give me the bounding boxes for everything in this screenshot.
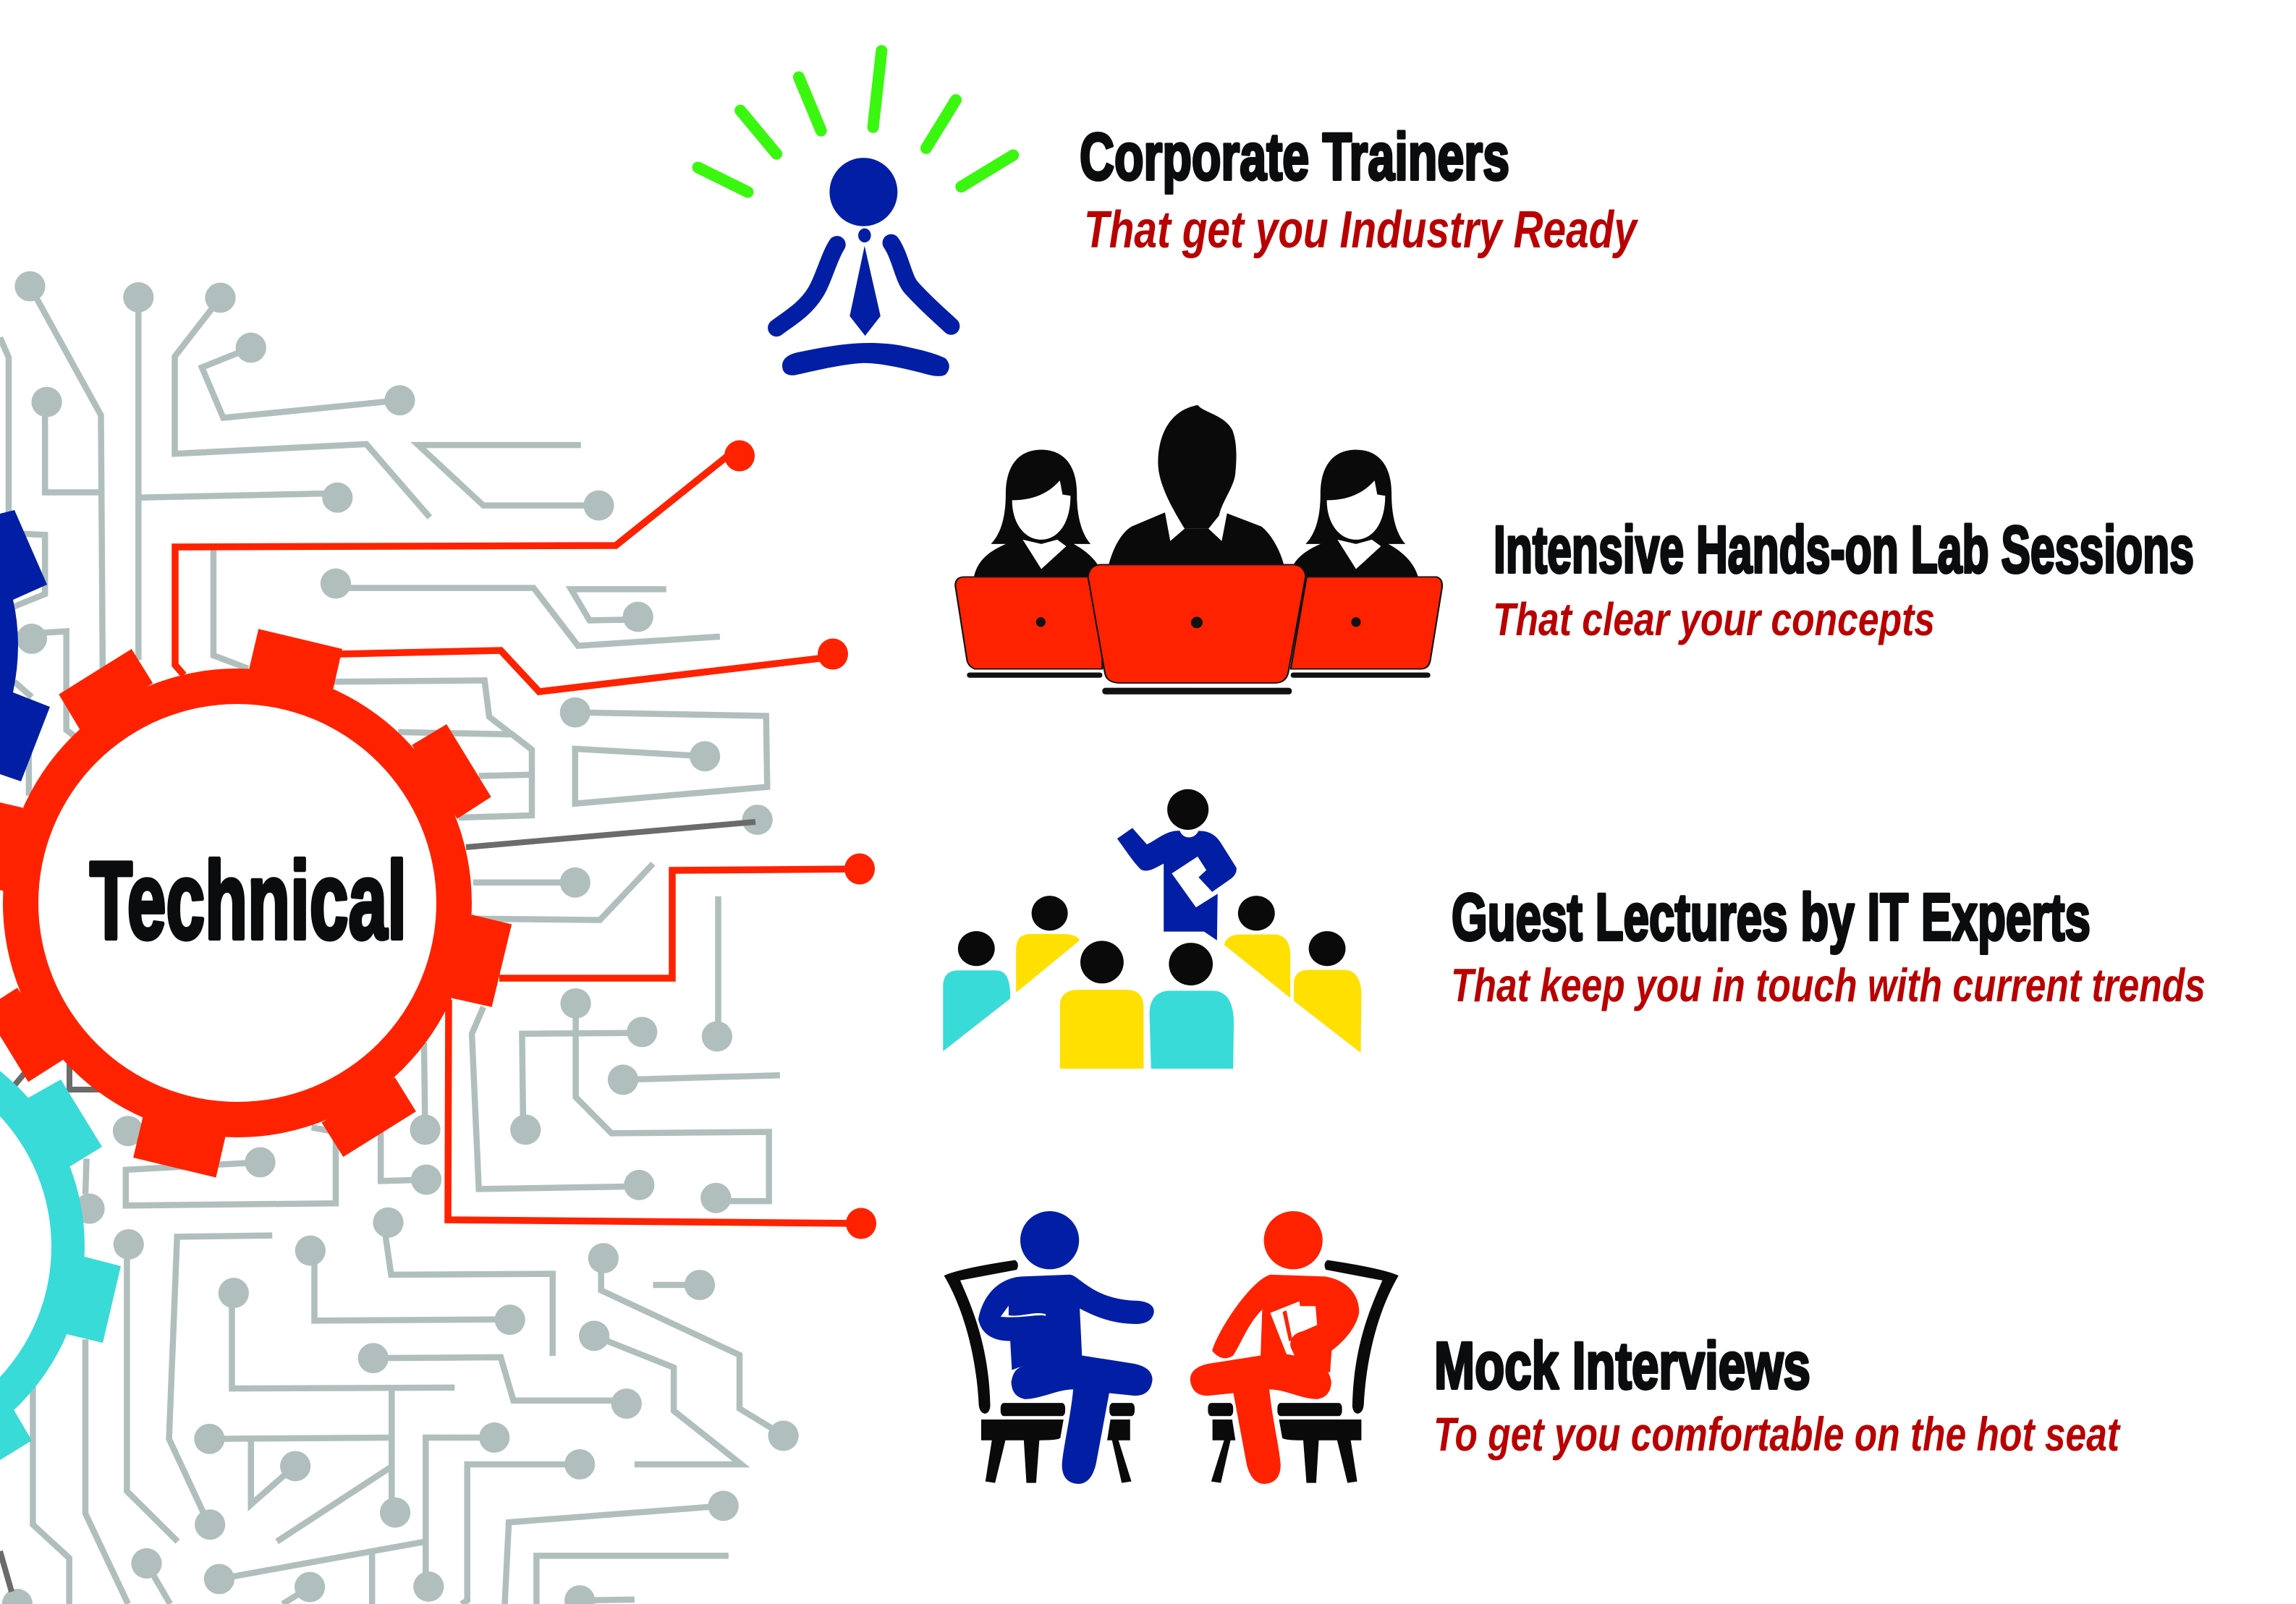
icon: meditating trainer xyxy=(698,51,1013,376)
lecturer xyxy=(1117,789,1237,941)
icon: mock interview xyxy=(944,1211,1399,1484)
gear label: Technical: Technical xyxy=(90,839,407,962)
arms xyxy=(776,243,951,328)
rays xyxy=(698,51,1013,192)
heading: Corporate Trainers: Corporate Trainers xyxy=(1080,120,1509,194)
icon: guest lecture xyxy=(943,789,1361,1069)
dark grey traces xyxy=(0,822,755,1592)
heading: Mock Interviews: Mock Interviews xyxy=(1434,1329,1810,1403)
red person xyxy=(1190,1211,1359,1484)
subheading: Corporate Trainers: That get you Industry Ready xyxy=(1084,201,1639,259)
left chair xyxy=(944,1260,1135,1483)
audience xyxy=(943,896,1361,1069)
right chair xyxy=(1208,1260,1399,1483)
subheading: Mock Interviews: To get you comfortable on the hot seat xyxy=(1433,1407,2121,1461)
red connector lines xyxy=(175,440,876,1239)
blue person xyxy=(978,1211,1154,1484)
icon: team at laptops xyxy=(955,405,1442,695)
blue gear xyxy=(0,510,50,781)
circuit traces upper xyxy=(0,271,773,898)
subheading: Lab Sessions: That clear your concepts xyxy=(1493,593,1935,645)
circuit traces lower xyxy=(2,864,799,1604)
cyan gear xyxy=(0,1022,121,1471)
left woman xyxy=(974,450,1103,577)
man xyxy=(1109,405,1284,564)
right woman xyxy=(1289,450,1418,577)
red gear xyxy=(0,629,512,1178)
laptops xyxy=(955,564,1442,683)
